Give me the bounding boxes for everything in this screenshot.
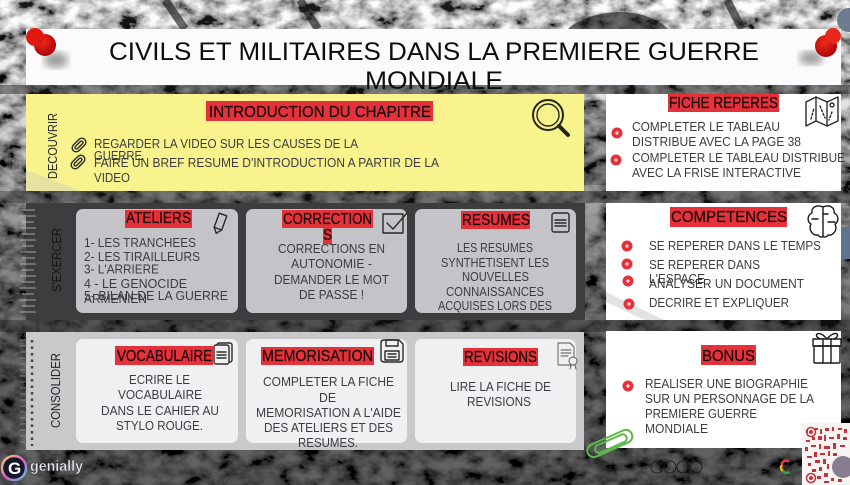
text: memorisation body: COMPLETER LA FICHE xyxy=(263,374,394,389)
text: competences list: SE REPERER DANS xyxy=(649,257,760,272)
heading: corrections xyxy=(282,210,373,244)
text: fiche reperes tasks: COMPLETER LE TABLEAU xyxy=(632,119,780,134)
icon: map xyxy=(806,97,838,126)
text: revisions body: LIRE LA FICHE DE xyxy=(450,379,551,394)
panel: competences xyxy=(606,203,841,320)
text: revisions body: REVISIONS xyxy=(467,394,531,409)
label: decouvrir: DECOUVRIR xyxy=(45,113,60,179)
text: resumes body: ACQUISES LORS DES xyxy=(438,298,552,313)
heading: ateliers: ATELIERS xyxy=(126,210,191,227)
bullet icons xyxy=(610,128,622,166)
text: ateliers list: 5- BILAN DE LA GUERRE xyxy=(84,288,228,303)
heading: bonus: BONUS xyxy=(702,348,755,365)
logo: genially: G xyxy=(8,459,21,478)
text: memorisation body: RESUMES. xyxy=(298,435,358,450)
text: competences list: SE REPERER DANS LE TEMPS xyxy=(649,238,821,253)
heading: corrections: CORRECTION xyxy=(283,211,372,228)
text: resumes body: SYNTHETISENT LES xyxy=(441,255,549,270)
text: resumes body: LES RESUMES xyxy=(457,240,533,255)
panel: fiche reperes xyxy=(606,94,845,191)
icon: green paperclip xyxy=(585,428,634,459)
text: vocabulaire body: VOCABULAIRE xyxy=(118,387,202,402)
heading: fiche reperes: FICHE REPERES xyxy=(669,95,778,112)
icon: document xyxy=(552,213,569,232)
icon: paperclip 2 xyxy=(70,154,86,170)
heading: competences: COMPETENCES xyxy=(671,209,787,226)
card: vocabulaire xyxy=(76,339,238,443)
heading: resumes: RESUMES xyxy=(462,212,530,229)
text: ateliers list xyxy=(84,235,228,306)
text: memorisation body: DES ATELIERS ET DES xyxy=(264,420,393,435)
card: resumes xyxy=(415,209,576,313)
text: competences list xyxy=(649,238,821,310)
logo: genially: genially xyxy=(30,458,84,475)
social icons xyxy=(651,461,702,473)
text: ateliers list: 4 - LE GENOCIDE xyxy=(84,276,187,291)
text: vocabulaire body: STYLO ROUGE. xyxy=(116,418,203,433)
text: memorisation body: MEMORISATION A L'AIDE xyxy=(256,405,401,420)
text: corrections body: CORRECTIONS EN xyxy=(278,241,385,256)
logo: genially xyxy=(2,456,84,480)
text: bonus body xyxy=(645,376,814,436)
text: bonus body: MONDIALE xyxy=(645,421,708,436)
text: vocabulaire body: ECRIRE LE xyxy=(129,372,190,387)
text: bonus body: SUR UN PERSONNAGE DE LA xyxy=(645,391,814,406)
text: bonus body: REALISER UNE BIOGRAPHIE xyxy=(645,376,808,391)
icon: brain xyxy=(808,206,838,237)
icon: gift xyxy=(813,334,841,363)
text: resumes body: CONNAISSANCES xyxy=(446,284,544,299)
text: ateliers list: ARMENIEN xyxy=(84,291,147,306)
text: ateliers list: 3- L'ARRIERE xyxy=(84,262,159,276)
bullet icon xyxy=(622,380,634,392)
text: corrections body: DEMANDER LE MOT xyxy=(274,272,389,287)
icon: paperclip 1 xyxy=(71,137,87,153)
text: vocabulaire body xyxy=(101,372,219,433)
icon: checkbox xyxy=(383,213,407,233)
qr code xyxy=(802,423,850,485)
text: resumes body: NOUVELLES xyxy=(462,269,529,284)
text: corrections body xyxy=(274,241,389,302)
text: bonus body: PREMIERE GUERRE xyxy=(645,406,757,421)
title text xyxy=(109,38,759,95)
text: revisions body xyxy=(450,379,551,409)
card: memorisation xyxy=(246,339,407,450)
panel: title xyxy=(26,29,841,95)
text: corrections body: AUTONOMIE - xyxy=(291,256,372,271)
text: decouvrir tasks xyxy=(94,136,439,185)
heading: corrections: S xyxy=(323,227,332,244)
text: corrections body: DE PASSE ! xyxy=(299,287,364,302)
text: competences list: L'ESPACE xyxy=(649,271,705,286)
icon: certificate xyxy=(558,343,577,369)
panel: consolider xyxy=(20,332,584,450)
icon: documents xyxy=(214,343,232,364)
title text: CIVILS ET MILITAIRES DANS LA PREMIERE GUERRE xyxy=(109,38,759,66)
icon: red pin left xyxy=(26,28,68,68)
text: resumes body xyxy=(438,240,552,313)
text: vocabulaire body: DANS LE CAHIER AU xyxy=(101,403,219,418)
text: fiche reperes tasks: DISTRIBUE AVEC LA PAGE 38 xyxy=(632,134,801,149)
card: revisions xyxy=(415,339,577,443)
label: consolider: CONSOLIDER xyxy=(48,353,63,428)
text: memorisation body: DE xyxy=(319,390,336,405)
icon: magnifier xyxy=(533,100,568,135)
panel: s'exercer xyxy=(20,203,585,320)
heading: vocabulaire: VOCABULAIRE xyxy=(117,348,212,365)
panel: bonus xyxy=(606,331,841,448)
icon: coloured google mark xyxy=(781,461,789,473)
icon: pencil xyxy=(212,213,227,235)
text: fiche reperes tasks: AVEC LA FRISE INTERACTIVE xyxy=(632,165,801,180)
text: competences list: DECRIRE ET EXPLIQUER xyxy=(649,295,789,310)
text: decouvrir tasks: GUERRE xyxy=(94,148,142,163)
text: competences list: ANALYSER UN DOCUMENT xyxy=(649,276,804,291)
icon: red pin right xyxy=(799,28,841,65)
card: ateliers xyxy=(76,209,238,313)
title text: MONDIALE xyxy=(365,67,503,95)
side tab right xyxy=(836,227,850,259)
icon: floppy disk xyxy=(381,340,403,362)
bullet icons xyxy=(622,240,634,310)
card: corrections xyxy=(246,209,407,313)
text: memorisation body xyxy=(256,374,401,450)
text: ateliers list: 2- LES TIRAILLEURS xyxy=(84,249,200,264)
panel: decouvrir xyxy=(26,94,584,191)
text: fiche reperes tasks xyxy=(632,119,845,180)
side tab top right xyxy=(837,8,850,32)
heading: memorisation: MEMORISATION xyxy=(262,348,373,365)
label: s'exercer: S'EXERCER xyxy=(49,228,64,292)
text: ateliers list: 1- LES TRANCHEES xyxy=(84,235,196,250)
text: decouvrir tasks: REGARDER LA VIDEO SUR LES CAUSES DE LA xyxy=(94,136,358,151)
heading: revisions: REVISIONS xyxy=(464,349,537,366)
text: decouvrir tasks: FAIRE UN BREF RESUME D'INTRODUCTION A PARTIR DE LA xyxy=(94,155,439,170)
heading: introduction du chapitre: INTRODUCTION DU CHAPITRE xyxy=(209,104,431,121)
text: decouvrir tasks: VIDEO xyxy=(94,170,130,185)
